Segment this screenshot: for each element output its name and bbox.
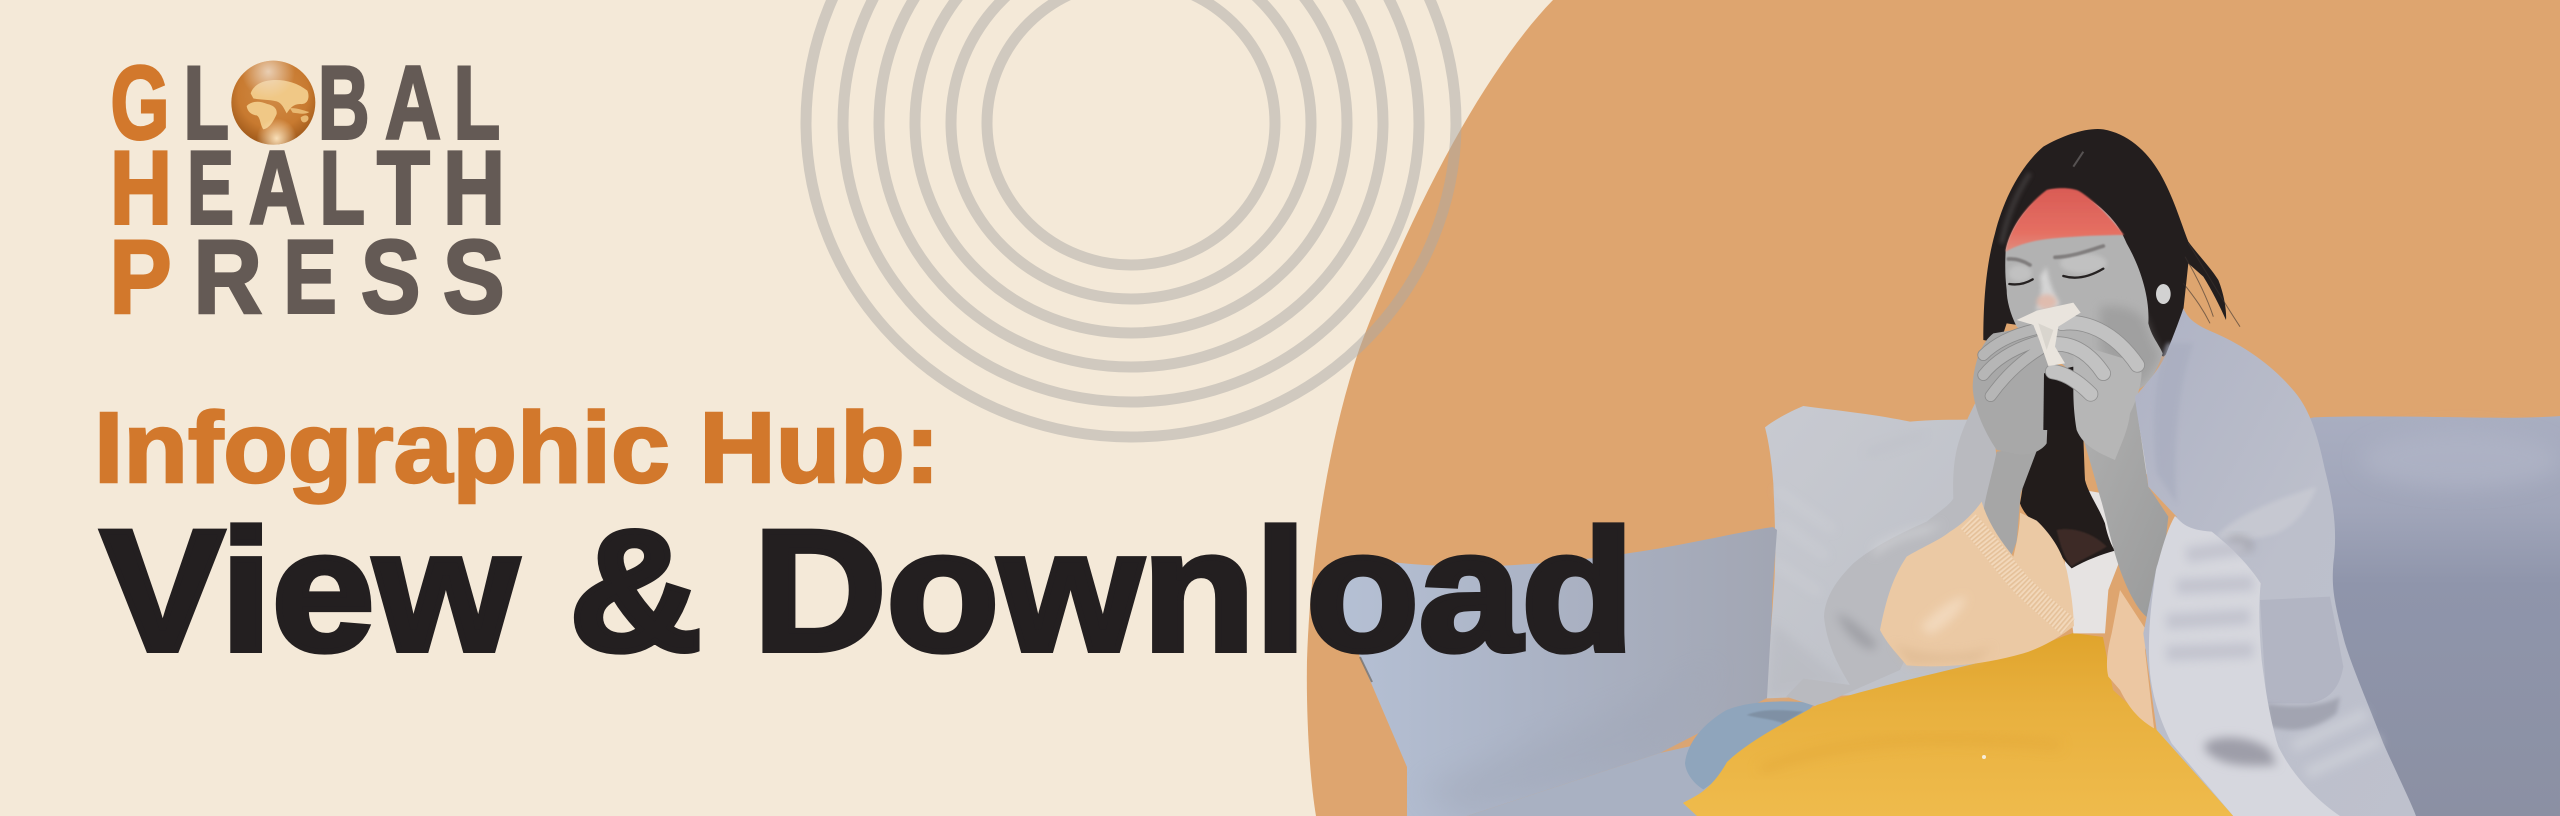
logo letters grey: B xyxy=(318,46,370,162)
logo letters grey: A xyxy=(385,46,441,162)
concentric rings xyxy=(806,0,1456,437)
blanket main xyxy=(2135,308,2416,816)
sofa seat xyxy=(1467,744,1730,816)
logo: Global Health Press xyxy=(110,46,505,336)
heading: View & Download: View & Download xyxy=(101,495,1634,687)
sweater cuff left xyxy=(1880,502,2074,666)
logo letters grey: A xyxy=(249,130,305,246)
logo letters grey: H xyxy=(443,130,505,246)
logo letters grey: L xyxy=(320,130,365,246)
photo: woman with a cold on a sofa xyxy=(1336,129,2560,816)
heading: Infographic Hub: Infographic Hub: xyxy=(94,392,940,504)
logo letters orange GHP xyxy=(110,46,172,336)
logo letters grey: S xyxy=(361,220,420,336)
sweater cuff right xyxy=(2107,590,2154,728)
eyebrows xyxy=(2008,246,2103,265)
jeans knee xyxy=(1685,701,1815,789)
left forearm xyxy=(1983,447,2038,557)
tissue xyxy=(2017,303,2081,366)
closed eyes xyxy=(2009,269,2103,284)
right forearm xyxy=(2075,397,2168,622)
headache highlight xyxy=(2006,188,2124,252)
sofa back cushion right xyxy=(2301,416,2560,816)
logo letters grey: E xyxy=(187,130,234,246)
blanket left drape xyxy=(1786,403,2000,707)
right hand xyxy=(2073,343,2142,460)
long hair xyxy=(2020,363,2115,568)
sofa armrest xyxy=(1336,527,1777,816)
sofa pillow left xyxy=(1765,406,1997,698)
shirt xyxy=(2063,377,2167,633)
hands and tissue xyxy=(1973,303,2142,460)
head xyxy=(1983,129,2240,390)
logo letters orange GHP: P xyxy=(110,220,172,336)
logo letters grey xyxy=(184,46,505,336)
logo letters grey: L xyxy=(454,46,500,162)
logo letters orange GHP: G xyxy=(110,46,170,162)
logo letters grey: L xyxy=(184,46,229,162)
blanket front fold xyxy=(2149,516,2340,816)
left hand xyxy=(1973,327,2050,455)
hair between hands xyxy=(2043,367,2087,430)
orange shape xyxy=(1307,0,2560,816)
hair xyxy=(1983,129,2226,357)
yellow pillow xyxy=(1683,633,2240,816)
logo letters grey: E xyxy=(284,220,337,336)
logo letters grey: S xyxy=(443,220,504,336)
icon: globe xyxy=(231,61,315,145)
logo letters grey: T xyxy=(377,130,430,246)
face xyxy=(2005,190,2163,390)
arms xyxy=(1983,397,2168,622)
logo letters grey: R xyxy=(194,220,262,336)
ear xyxy=(2156,284,2171,304)
logo letters orange GHP: H xyxy=(110,130,172,246)
